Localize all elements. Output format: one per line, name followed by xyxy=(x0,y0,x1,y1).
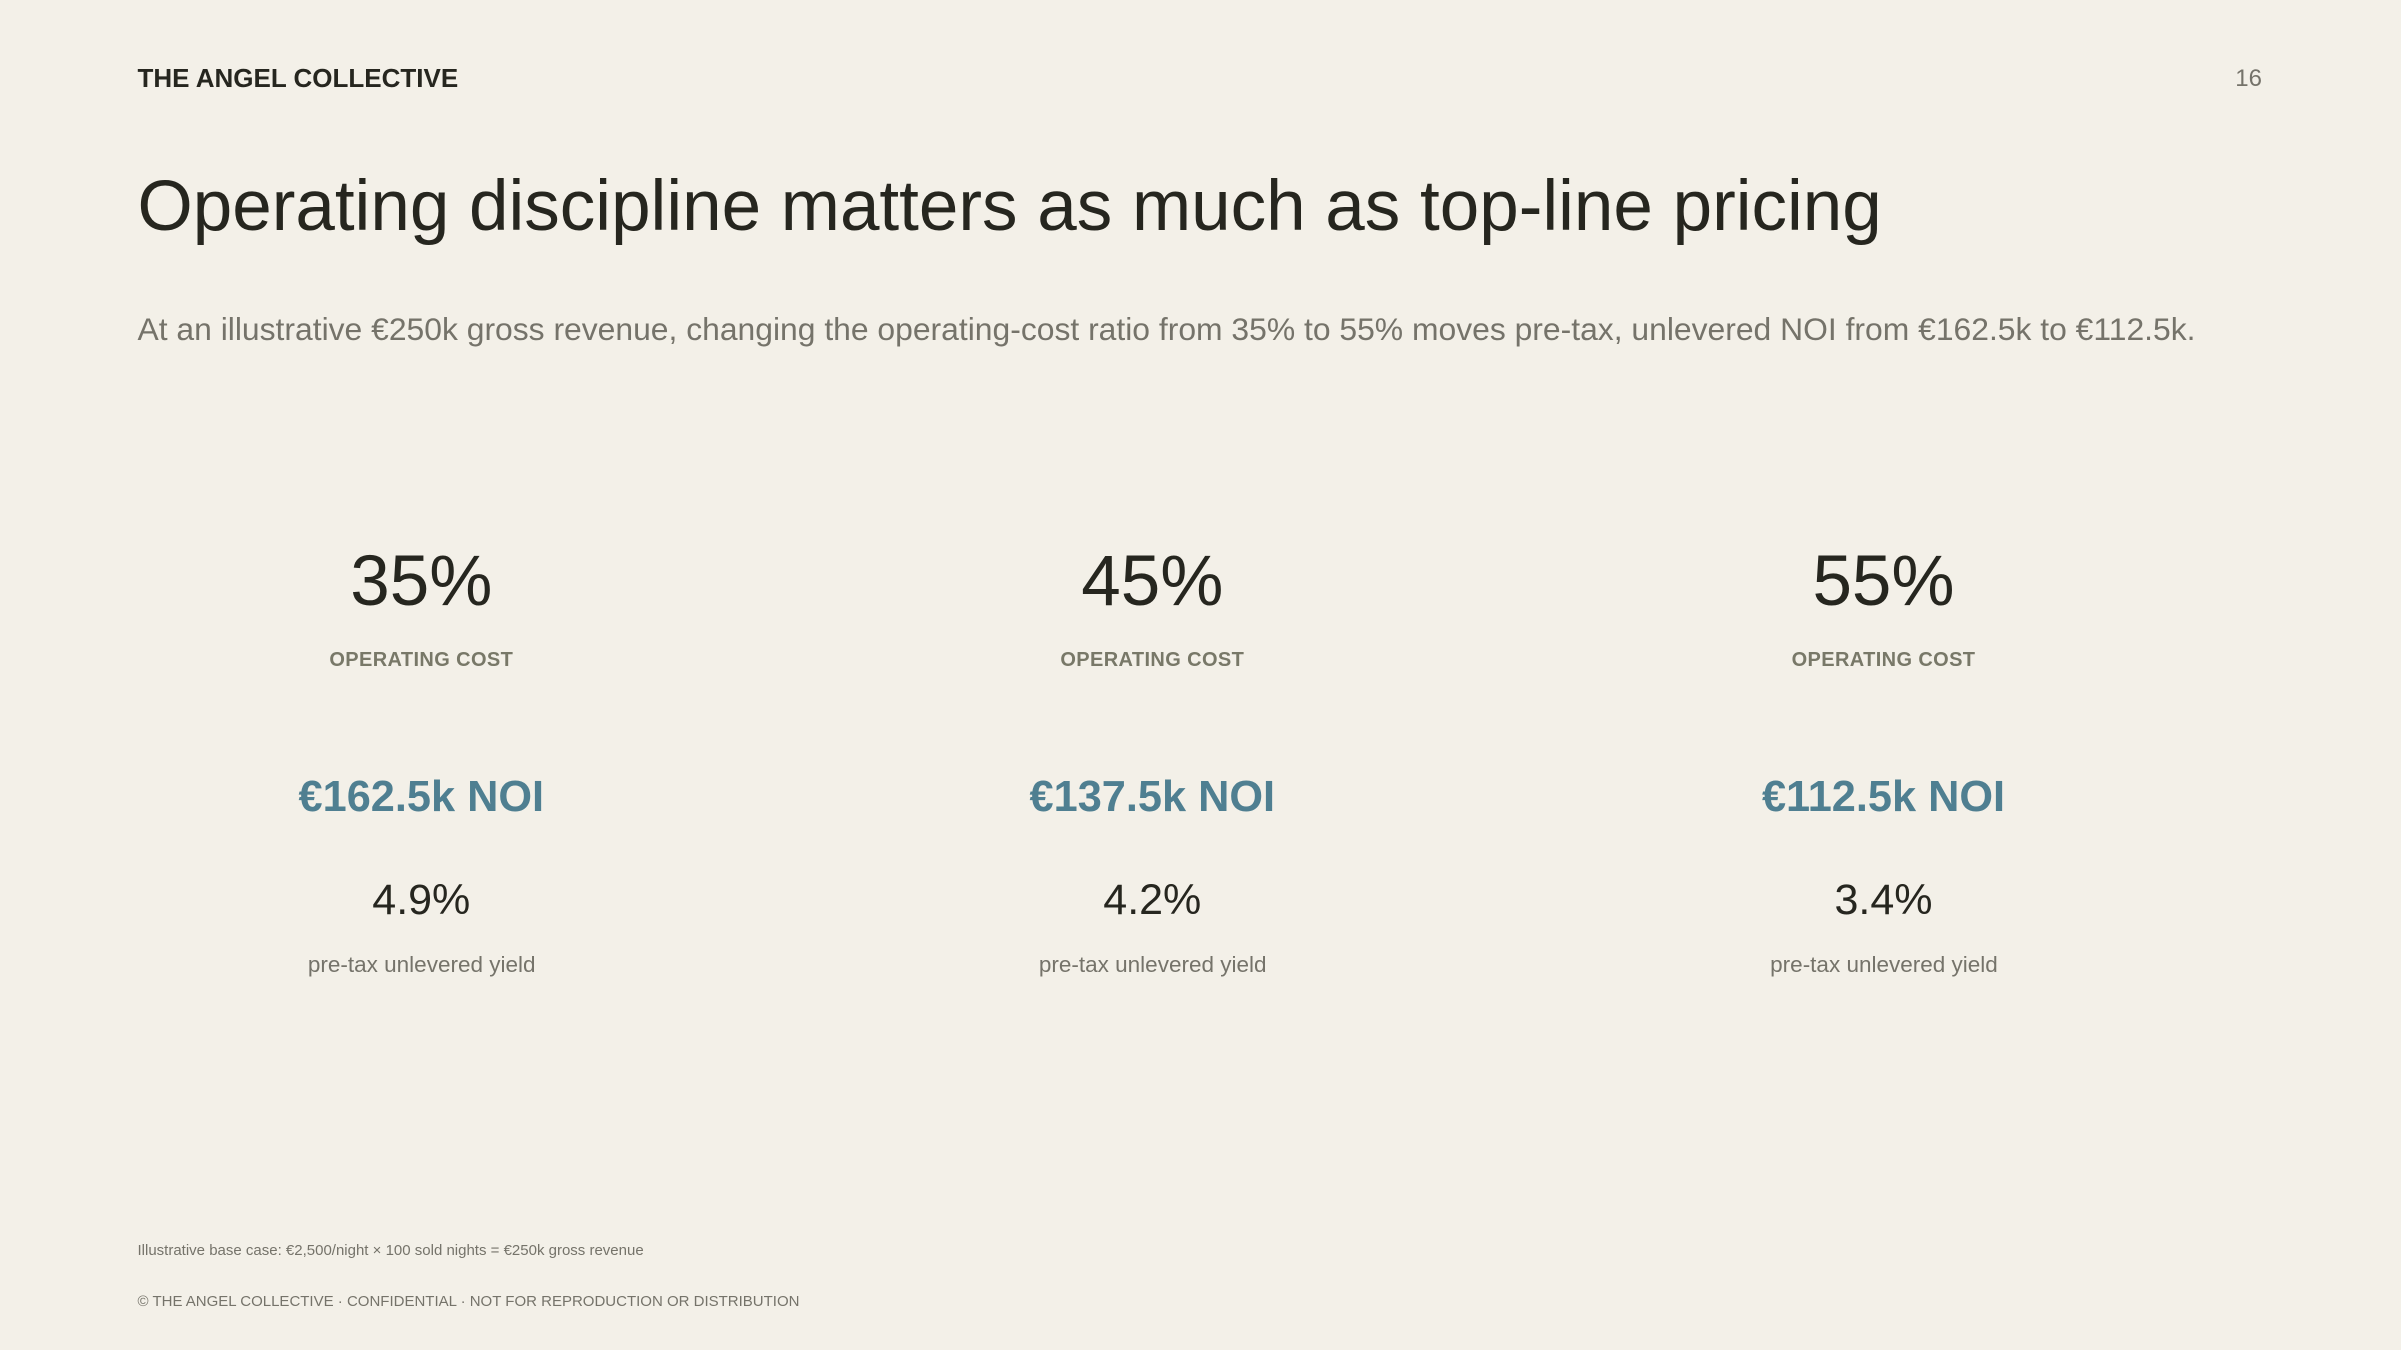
yield value: 4.9% xyxy=(372,876,470,924)
yield label: pre-tax unlevered yield xyxy=(1770,952,1998,977)
footnote: Illustrative base case: €2,500/night × 100 sold nights = €250k gross revenue xyxy=(138,1242,644,1259)
operating cost value: 55% xyxy=(1812,542,1955,621)
footer confidentiality notice: © THE ANGEL COLLECTIVE · CONFIDENTIAL · NOT FOR REPRODUCTION OR DISTRIBUTION xyxy=(138,1293,799,1310)
yield label: pre-tax unlevered yield xyxy=(308,952,536,977)
page number: 16 xyxy=(2235,65,2262,92)
operating cost label: OPERATING COST xyxy=(1792,649,1975,671)
panel: 45% scenario xyxy=(1030,542,1275,977)
operating cost value: 35% xyxy=(350,542,492,621)
NOI value: €112.5k NOI xyxy=(1762,773,2005,821)
panel: 55% scenario xyxy=(1762,542,2005,977)
operating cost value: 45% xyxy=(1081,542,1223,621)
yield value: 4.2% xyxy=(1103,876,1201,924)
brand name: THE ANGEL COLLECTIVE xyxy=(138,63,458,93)
operating cost label: OPERATING COST xyxy=(1060,649,1244,671)
yield label: pre-tax unlevered yield xyxy=(1039,952,1267,977)
yield value: 3.4% xyxy=(1834,876,1933,924)
title: Operating discipline matters as much as top-line pricing xyxy=(138,167,1882,246)
NOI value: €137.5k NOI xyxy=(1030,773,1275,821)
panel: 35% scenario xyxy=(299,542,544,977)
NOI value: €162.5k NOI xyxy=(299,773,544,821)
operating cost label: OPERATING COST xyxy=(329,649,513,671)
subtitle: At an illustrative €250k gross revenue, changing the operating-cost ratio from 35% to 55% moves pre-tax, unlevered NOI from €162.5k to €112.5k. xyxy=(138,311,2195,347)
